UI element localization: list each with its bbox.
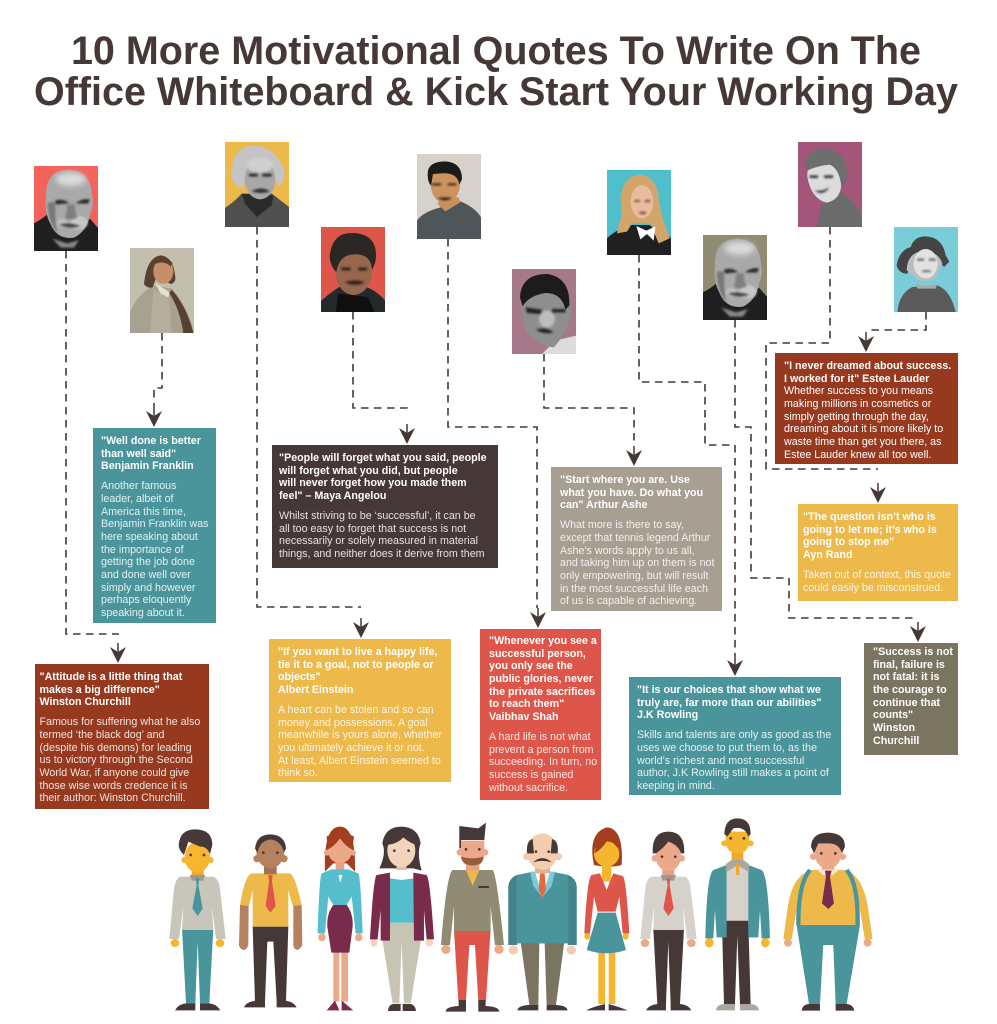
body text: in the most successful life each — [560, 583, 708, 595]
body text: Estee Lauder knew all too well. — [784, 449, 931, 461]
body text: keeping in mind. — [637, 780, 715, 792]
portrait: Estee Lauder — [894, 227, 958, 312]
panel: Benjamin Franklin quote — [93, 428, 216, 623]
body text — [784, 385, 943, 461]
panel: Albert Einstein quote — [269, 639, 451, 782]
person 5: man in olive jumper — [441, 823, 504, 1012]
body text: At least, Albert Einstein seemed to — [278, 755, 441, 767]
body text: leader, albeit of — [101, 493, 174, 505]
body text: success is gained — [489, 769, 573, 781]
body text: without sacrifice. — [489, 782, 568, 794]
panel: J.K Rowling quote — [629, 677, 841, 795]
body text: their author: Winston Churchill. — [40, 792, 186, 804]
quote heading: Vaibhav Shah — [489, 711, 558, 723]
body text: could easily be misconstrued. — [803, 582, 943, 594]
title: 10 More Motivational Quotes To Write On The — [71, 29, 921, 73]
body text: things, and neither does it derive from them — [279, 548, 485, 560]
body text: Benjamin Franklin was — [101, 518, 209, 530]
portrait: Ayn Rand — [798, 142, 862, 227]
quote heading — [278, 646, 437, 696]
portrait: Benjamin Franklin — [130, 248, 194, 333]
body text: world’s richest and most successful — [637, 755, 804, 767]
quote heading: Ayn Rand — [803, 549, 852, 561]
portrait: Vaibhav Shah — [417, 154, 481, 239]
people illustration: right group — [508, 818, 873, 1011]
panel: Winston Churchill attitude quote — [35, 664, 209, 809]
quote heading — [637, 684, 821, 721]
body text — [278, 704, 442, 779]
quote heading: "Success is not — [873, 646, 953, 658]
body text: making millions in cosmetics or — [784, 398, 931, 410]
connector: Angelou to quote — [353, 312, 415, 444]
quote heading: "The question isn’t who is — [803, 511, 936, 523]
quote heading: "It is our choices that show what we — [637, 684, 821, 696]
body text: think so. — [278, 767, 318, 779]
quote heading: Albert Einstein — [278, 684, 353, 696]
person 10: large man with braces — [783, 833, 873, 1011]
body text: and taking him up on them is not — [560, 557, 714, 569]
quote heading: final, failure is — [873, 659, 945, 671]
title: Office Whiteboard & Kick Start Your Working Day — [34, 70, 958, 114]
panel: Estee Lauder quote — [775, 353, 958, 464]
quote heading: public glories, never — [489, 673, 593, 685]
body text: meanwhile is yours alone, whether — [278, 729, 442, 741]
body text: and done well over — [101, 569, 191, 581]
body text: A hard life is not what — [489, 731, 591, 743]
quote heading: Benjamin Franklin — [101, 460, 194, 472]
quote heading: going to let me; it’s who is — [803, 524, 937, 536]
quote heading: will never forget how you made them — [279, 477, 467, 489]
quote heading: J.K Rowling — [637, 709, 698, 721]
quote heading — [873, 646, 953, 747]
body text: simply getting through the day, — [784, 411, 929, 423]
quote heading: going to stop me" — [803, 536, 894, 548]
body text: those wise words credence it is — [40, 780, 187, 792]
body text: World War, if anyone could give — [40, 767, 189, 779]
portrait: J.K Rowling — [607, 170, 671, 255]
quote heading: "Well done is better — [101, 435, 201, 447]
body text — [101, 480, 209, 619]
body text: simply and however — [101, 582, 195, 594]
quote heading: "People will forget what you said, people — [279, 452, 487, 464]
body text: termed ‘the black dog’ and — [40, 729, 164, 741]
connector: Lauder to quote — [858, 312, 926, 352]
quote heading: can" Arthur Ashe — [560, 499, 647, 511]
connector: Franklin to quote — [146, 333, 162, 427]
quote heading: the private sacrifices — [489, 686, 595, 698]
quote heading: truly are, far more than our abilities" — [637, 697, 821, 709]
body text: Whilst striving to be ‘successful’, it can be — [279, 510, 476, 522]
body text: America this time, — [101, 506, 186, 518]
body text — [560, 519, 714, 607]
body text: (despite his demons) for leading — [40, 742, 192, 754]
body text: uses we choose to put them to, as the — [637, 742, 817, 754]
person 9: tall man in teal jacket — [705, 818, 770, 1010]
quote heading: "Start where you are. Use — [560, 474, 690, 486]
body text: What more is there to say, — [560, 519, 684, 531]
quote heading: "Attitude is a little thing that — [40, 671, 182, 683]
portrait: Winston Churchill (olive) — [703, 235, 767, 320]
quote heading: makes a big difference" — [40, 684, 160, 696]
person 3: woman in teal blazer — [318, 827, 363, 1010]
people illustration: left group — [169, 823, 504, 1012]
quote heading: successful person, — [489, 648, 586, 660]
portrait: Winston Churchill (red) — [34, 166, 98, 251]
quote heading: continue that — [873, 697, 940, 709]
quote heading — [784, 360, 951, 385]
panel: Arthur Ashe quote — [551, 467, 722, 611]
quote heading: than well said" — [101, 448, 176, 460]
body text — [279, 510, 485, 560]
quote heading: feel" – Maya Angelou — [279, 490, 386, 502]
quote heading: Winston Churchill — [40, 696, 131, 708]
body text: only empowering, but will result — [560, 570, 709, 582]
body text: the importance of — [101, 544, 184, 556]
body text — [489, 731, 597, 794]
person 8: man in white shirt and red tie — [640, 832, 697, 1010]
quote heading: I worked for it" Estee Lauder — [784, 373, 929, 385]
quote heading: counts" — [873, 709, 913, 721]
quote heading: "I never dreamed about success. — [784, 360, 951, 372]
person 1: teal tie man — [169, 829, 226, 1010]
body text: waste time than get you there, as — [784, 436, 941, 448]
body text: here speaking about — [101, 531, 198, 543]
body text: Another famous — [101, 480, 176, 492]
portrait: Albert Einstein — [225, 142, 289, 227]
quote heading: Winston — [873, 722, 915, 734]
quote heading: objects" — [278, 671, 320, 683]
body text: except that tennis legend Arthur — [560, 532, 710, 544]
body text: us to victory through the Second — [40, 754, 193, 766]
quote heading: will forget what you did, but people — [279, 465, 458, 477]
quote heading — [489, 635, 597, 723]
body text: dreaming about it is more likely to — [784, 423, 943, 435]
body text: Taken out of context, this quote — [803, 569, 951, 581]
quote heading — [803, 511, 937, 561]
connector: Churchill to success quote — [735, 320, 926, 642]
portrait: Maya Angelou — [321, 227, 385, 312]
person 7: woman in red jacket — [584, 827, 629, 1010]
body text: succeeding. In turn, no — [489, 756, 597, 768]
quote heading: Churchill — [873, 735, 919, 747]
connector: Einstein to quote — [257, 227, 369, 638]
body text: Skills and talents are only as good as the — [637, 729, 831, 741]
quote heading: what you have. Do what you — [560, 487, 703, 499]
connector: Shah to quote — [448, 239, 546, 628]
quote heading: to reach them" — [489, 698, 564, 710]
quote heading: "Whenever you see a — [489, 635, 597, 647]
quote heading — [560, 474, 703, 511]
person 2: yellow shirt man — [239, 834, 302, 1007]
quote heading: "If you want to live a happy life, — [278, 646, 437, 658]
body text: Famous for suffering what he also — [40, 716, 200, 728]
quote heading: tie it to a goal, not to people or — [278, 659, 434, 671]
quote heading: you only see the — [489, 660, 573, 672]
quote heading — [101, 435, 201, 472]
body text — [40, 716, 200, 804]
body text: Ashe’s words apply to us all, — [560, 545, 695, 557]
person 6: bald man in teal jacket — [508, 833, 577, 1010]
body text: speaking about it. — [101, 607, 185, 619]
body text: getting the job done — [101, 556, 195, 568]
body text — [803, 569, 951, 594]
body text: A heart can be stolen and so can — [278, 704, 434, 716]
quote heading: not fatal: it is — [873, 671, 940, 683]
connector: Rowling to quote — [639, 255, 743, 676]
quote heading — [40, 671, 182, 708]
body text: you ultimately achieve it or not. — [278, 742, 425, 754]
panel: Winston Churchill success quote — [864, 643, 958, 755]
body text: all too easy to forget that success is not — [279, 523, 466, 535]
person 4: woman in maroon cardigan — [370, 827, 434, 1011]
panel: Ayn Rand quote — [798, 504, 958, 601]
title — [34, 29, 958, 114]
body text: author, J.K Rowling still makes a point of — [637, 767, 829, 779]
connector: Ashe to quote — [544, 354, 642, 466]
panel: Maya Angelou quote — [272, 445, 498, 568]
body text: perhaps eloquently — [101, 594, 191, 606]
body text: necessarily or solely measured in material — [279, 535, 478, 547]
body text: prevent a person from — [489, 744, 594, 756]
portrait: Arthur Ashe — [512, 269, 576, 354]
body text: Whether success to you means — [784, 385, 933, 397]
body text — [637, 729, 831, 792]
quote heading — [279, 452, 487, 502]
body text: of us is capable of achieving. — [560, 595, 697, 607]
body text: money and possessions. A goal — [278, 717, 428, 729]
quote heading: the courage to — [873, 684, 947, 696]
panel: Vaibhav Shah quote — [480, 629, 601, 800]
connector: Churchill to attitude quote — [66, 251, 126, 663]
connector: Rand to quote — [766, 227, 886, 503]
